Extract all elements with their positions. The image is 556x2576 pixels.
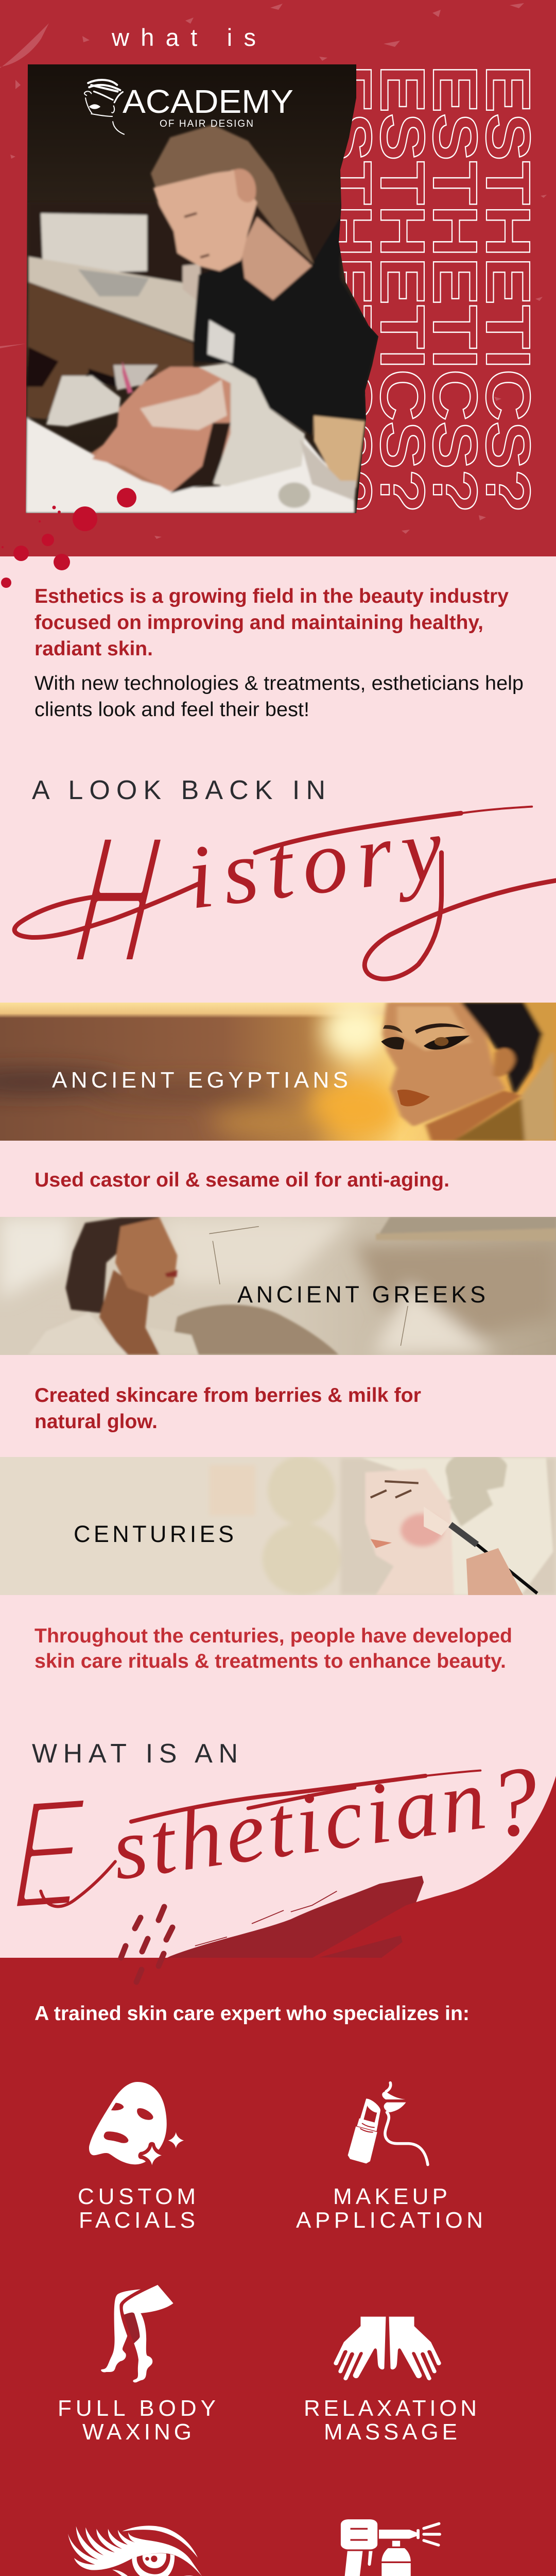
- label: relaxation massage: MASSAGE: [324, 2419, 457, 2445]
- outlined vertical word ESTHETICS?: ESTHETICS?: [315, 65, 385, 513]
- text: centuries: [34, 1625, 512, 1672]
- heading: what is an: WHAT IS AN: [32, 1739, 238, 1769]
- text block: esthetics intro: focused on improving and maintaining healthy,: [34, 612, 483, 634]
- label: relaxation massage: RELAXATION: [304, 2396, 477, 2421]
- banner: ancient greeks: ANCIENT GREEKS: [237, 1281, 485, 1308]
- banner: centuries: CENTURIES: [74, 1521, 234, 1547]
- outlined vertical word ESTHETICS?: ESTHETICS?: [473, 65, 543, 513]
- logo: academy white: OF HAIR DESIGN: [160, 118, 253, 129]
- text: egyptians: Used castor oil & sesame oil for anti-aging.: [34, 1169, 449, 1191]
- outlined vertical word ESTHETICS?: [315, 65, 543, 513]
- banner: ancient egyptians: [0, 1001, 556, 1141]
- logo: academy white: ACADEMY: [123, 83, 293, 120]
- icon: spray tan gun: [341, 2519, 440, 2576]
- label: full body waxing: FULL BODY: [58, 2396, 216, 2421]
- panel: services red section: [0, 1776, 556, 2576]
- script heading: Esthetician?: ?: [482, 1745, 546, 1859]
- text block: esthetics intro: clients look and feel their best!: [34, 699, 309, 721]
- red drops: [2, 488, 136, 570]
- red drop on pink: [1, 578, 11, 588]
- script heading: History: H: [66, 797, 169, 1001]
- label: full body waxing: WAXING: [82, 2419, 192, 2445]
- icon: eye with lashes: [68, 2526, 202, 2576]
- label: custom facials: FACIALS: [79, 2208, 195, 2233]
- label: full body waxing: [58, 2396, 216, 2445]
- title: what is: what is: [111, 24, 256, 51]
- label: relaxation massage: [304, 2396, 477, 2445]
- red curved corner with brush: [167, 1776, 556, 1958]
- text block: esthetics intro: Esthetics is a growing field in the beauty industry: [34, 585, 509, 607]
- script heading: History: istory: [182, 796, 457, 928]
- text: trained skin care expert: A trained skin care expert who specializes in:: [34, 2003, 470, 2025]
- script heading: Esthetician?: sthetician: [106, 1750, 495, 1899]
- script heading: Esthetician?: [10, 1743, 546, 1942]
- label: custom facials: [78, 2184, 196, 2233]
- text: greeks: [34, 1384, 421, 1433]
- outlined vertical word ESTHETICS?: ESTHETICS?: [420, 65, 490, 513]
- photo: esthetician treating client: [26, 64, 386, 513]
- text: centuries: Throughout the centuries, people have developed: [34, 1625, 512, 1647]
- text block: esthetics intro: radiant skin.: [34, 638, 153, 660]
- banner: ancient greeks: [0, 1217, 556, 1355]
- text block: esthetics intro: [34, 585, 524, 721]
- text: greeks: Created skincare from berries & milk for: [34, 1384, 421, 1406]
- script heading: Esthetician?: E: [10, 1764, 88, 1942]
- script heading: History: [14, 796, 556, 1001]
- icon: legs waxing: [101, 2285, 173, 2382]
- text: centuries: skin care rituals & treatments to enhance beauty.: [34, 1650, 506, 1672]
- banner: ancient egyptians: ANCIENT EGYPTIANS: [52, 1067, 348, 1093]
- text: greeks: natural glow.: [34, 1411, 158, 1433]
- label: makeup application: APPLICATION: [296, 2208, 483, 2233]
- icon: lipstick and lips: [348, 2083, 428, 2165]
- icon: face mask: [89, 2082, 184, 2165]
- icon: massage hands: [334, 2317, 441, 2380]
- panel: hero what is esthetics: [0, 0, 556, 570]
- logo: academy white: [84, 80, 293, 134]
- outlined vertical word ESTHETICS?: ESTHETICS?: [368, 65, 438, 513]
- label: custom facials: CUSTOM: [78, 2184, 196, 2209]
- brush dashes: [121, 1907, 172, 1982]
- heading: a look back in: A LOOK BACK IN: [32, 775, 325, 805]
- text block: esthetics intro: With new technologies & treatments, estheticians help: [34, 672, 524, 694]
- label: makeup application: [296, 2184, 483, 2233]
- label: makeup application: MAKEUP: [333, 2184, 447, 2209]
- banner: centuries: [0, 1451, 556, 1595]
